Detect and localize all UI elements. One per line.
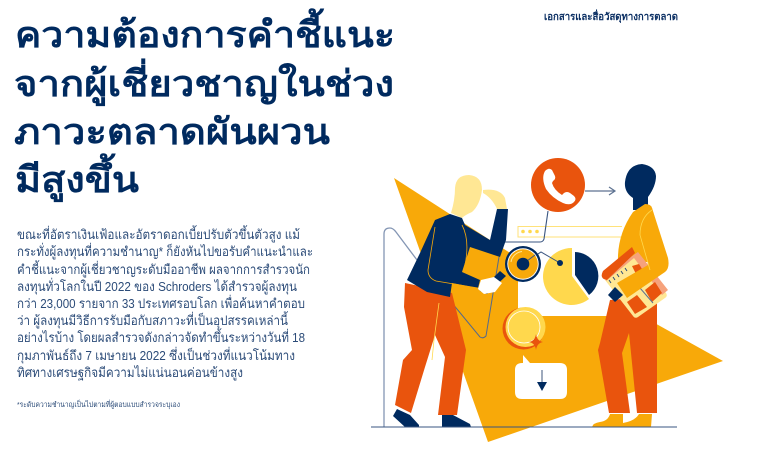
torso (618, 204, 664, 262)
thin connector line (384, 228, 417, 427)
hair and raised arm (451, 175, 507, 218)
head and neck (625, 164, 656, 210)
body paragraph: กุมภาพันธ์ถึง 7 เมษายน 2022 ซึ่งเป็นช่วงที่แนวโน้มทาง (17, 346, 295, 364)
icon: phone (531, 158, 585, 212)
trousers (598, 296, 657, 413)
title: จากผู้เชี่ยวชาญในช่วง (14, 58, 394, 107)
magnifier (480, 246, 541, 294)
body paragraph: ว่า ผู้ลงทุนมีวิธีการรับมือกับสภาวะที่เป็นอุปสรรคเหล่านี้ (17, 311, 288, 329)
phone connector (505, 211, 548, 242)
title: ภาวะตลาดผันผวน (14, 111, 330, 152)
body paragraph: ขณะที่อัตราเงินเฟ้อและอัตราดอกเบี้ยปรับตัวขึ้นตัวสูง แม้ (17, 225, 300, 243)
pie chart (523, 248, 598, 305)
body paragraph: คำชี้แนะจากผู้เชี่ยวชาญระดับมืออาชีพ ผลจากการสำรวจนัก (17, 260, 310, 278)
body paragraph: กระทั่งผู้ลงทุนที่ความชำนาญ* ก็ยังหันไปขอรับคำแนะนำและ (17, 242, 313, 260)
speech bubble with arrow (515, 355, 567, 399)
body paragraph: กว่า 23,000 รายจาก 33 ประเทศรอบโลก เพื่อค้นหาคำตอบ (17, 295, 305, 311)
title (14, 8, 395, 203)
header label: เอกสารและสื่อวัสดุทางการตลาด (544, 9, 678, 23)
legs (395, 283, 466, 415)
title: ความต้องการคำชี้แนะ (15, 8, 395, 55)
book (602, 247, 668, 318)
coin (502, 307, 546, 350)
glove (478, 277, 502, 294)
left person (393, 175, 541, 427)
ground line (371, 426, 677, 428)
footnote: *ระดับความชำนาญเป็นไปตามที่ผู้ตอบแบบสำรวจระบุเอง (17, 399, 180, 409)
arrow (585, 187, 615, 195)
dashboard window (518, 226, 622, 237)
body paragraph (17, 225, 313, 381)
torso (407, 209, 508, 297)
sleeve (617, 208, 669, 298)
shoes (592, 414, 652, 427)
shoes (393, 409, 471, 427)
right person (592, 164, 669, 427)
body paragraph: ทิศทางเศรษฐกิจมีความไม่แน่นอนค่อนข้างสูง (17, 365, 243, 381)
title: มีสูงขึ้น (15, 153, 139, 203)
body paragraph: อย่างไรบ้าง โดยผลสำรวจดังกล่าวจัดทำขึ้นระหว่างวันที่ 18 (17, 328, 305, 345)
illustration (371, 158, 723, 442)
hand (608, 287, 623, 302)
background triangle (394, 178, 723, 442)
body paragraph: ลงทุนทั่วโลกในปี 2022 ของ Schroders ได้สำรวจผู้ลงทุน (17, 278, 297, 295)
